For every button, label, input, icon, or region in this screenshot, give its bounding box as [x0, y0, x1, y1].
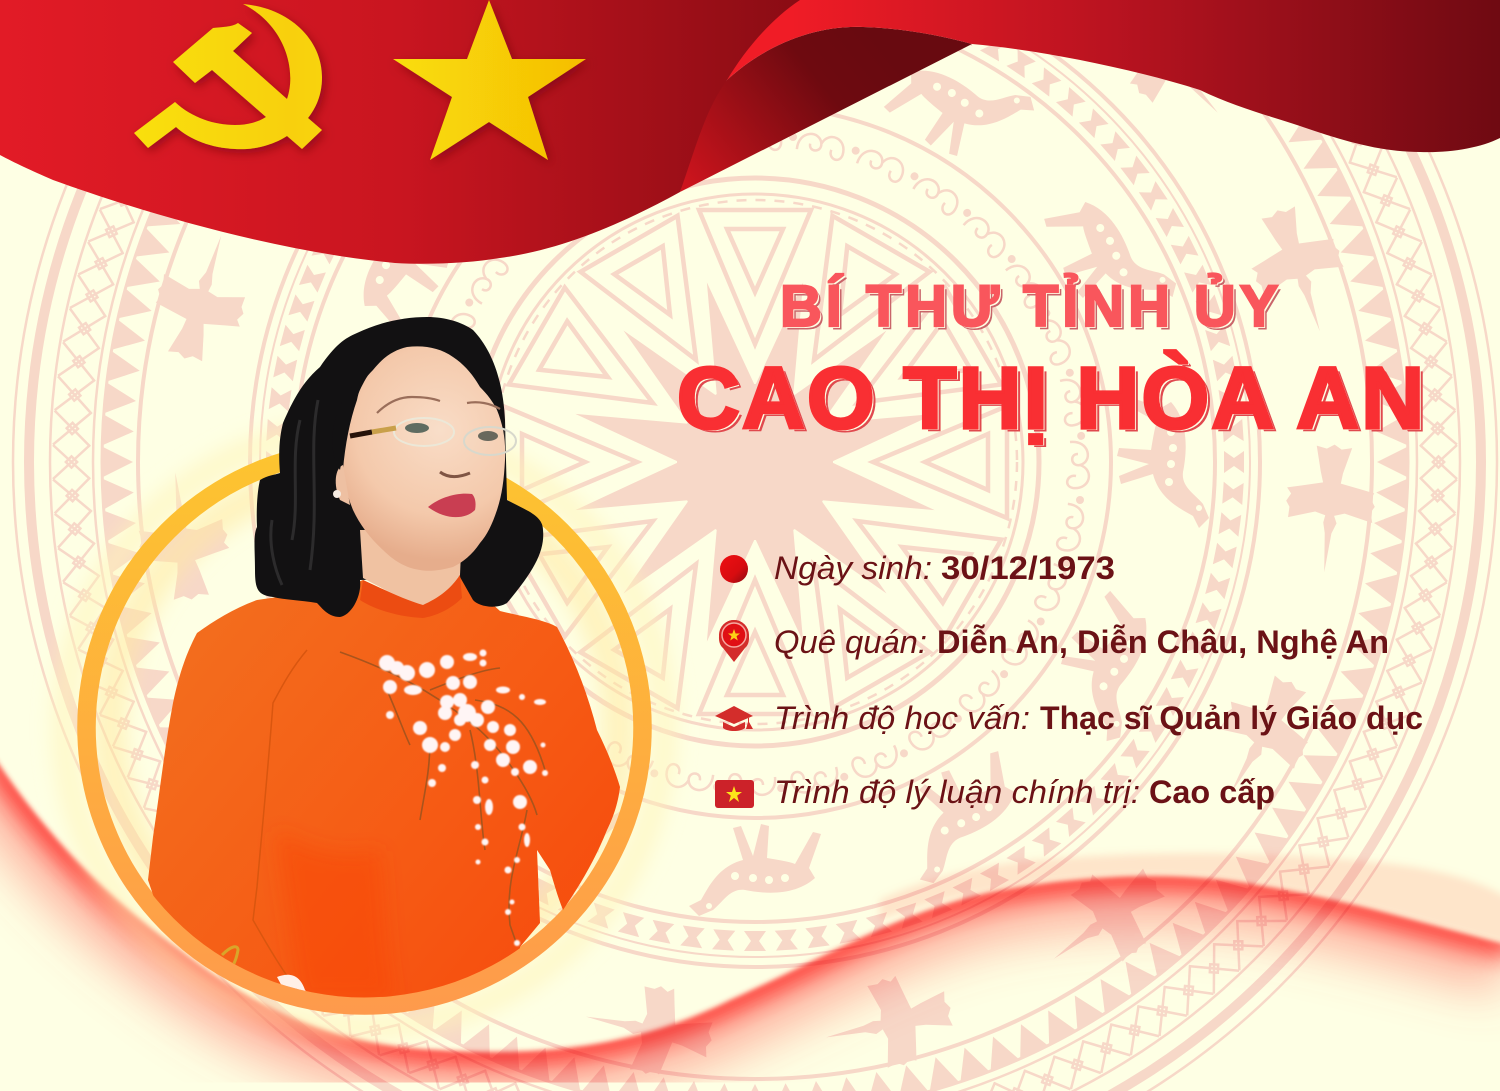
row: date of birth: 30/12/1973: [941, 550, 1115, 586]
title: name: CAO THỊ HÒA AN: [677, 350, 1426, 447]
portrait ring: [64, 428, 664, 1028]
icon: location pin: [719, 620, 749, 662]
glasses: [350, 418, 516, 455]
portrait: woman in orange ao dai: [148, 317, 620, 1010]
collar: [360, 575, 462, 618]
hair: [254, 317, 543, 617]
top banner: party flag: [0, 0, 1500, 264]
row: political theory: Cao cấp: [1149, 774, 1275, 810]
row: political theory: [715, 774, 1275, 810]
row: education: [715, 700, 1423, 736]
title: position: BÍ THƯ TỈNH ỦY: [780, 274, 1282, 339]
icon: red dot: [720, 555, 748, 583]
hair strand over temple: [339, 376, 368, 470]
banner: right ribbon: [727, 0, 1500, 152]
icon: hammer and sickle: [134, 4, 322, 149]
eyebrows: [377, 397, 440, 413]
lips: [428, 494, 476, 517]
row: political theory: Trình độ lý luận chính trị:: [774, 774, 1140, 810]
row: hometown: [719, 620, 1389, 662]
banner: dark fold: [680, 27, 972, 192]
nose: [440, 472, 470, 477]
embroidered branches: [340, 652, 545, 945]
row: hometown: Quê quán:: [774, 624, 927, 660]
bottom red silk wave: [0, 750, 1500, 1052]
eyes: [405, 423, 429, 433]
hair highlights: [271, 400, 318, 585]
dress: [148, 575, 620, 1010]
banner: left red flag: [0, 0, 810, 264]
row: education: Thạc sĩ Quản lý Giáo dục: [1040, 700, 1423, 736]
ear and earring: [336, 465, 350, 505]
face: [343, 346, 505, 571]
neck: [360, 530, 462, 607]
icon: Vietnam flag: [715, 780, 754, 808]
row: education: Trình độ học vấn:: [774, 700, 1030, 736]
row: date of birth: [720, 550, 1115, 586]
info list: [715, 550, 1423, 810]
embroidered blossoms: [379, 650, 548, 946]
icon: yellow star: [393, 0, 586, 160]
row: hometown: Diễn An, Diễn Châu, Nghệ An: [937, 624, 1389, 660]
icon: graduation cap: [715, 706, 753, 731]
row: date of birth: Ngày sinh:: [774, 550, 932, 586]
